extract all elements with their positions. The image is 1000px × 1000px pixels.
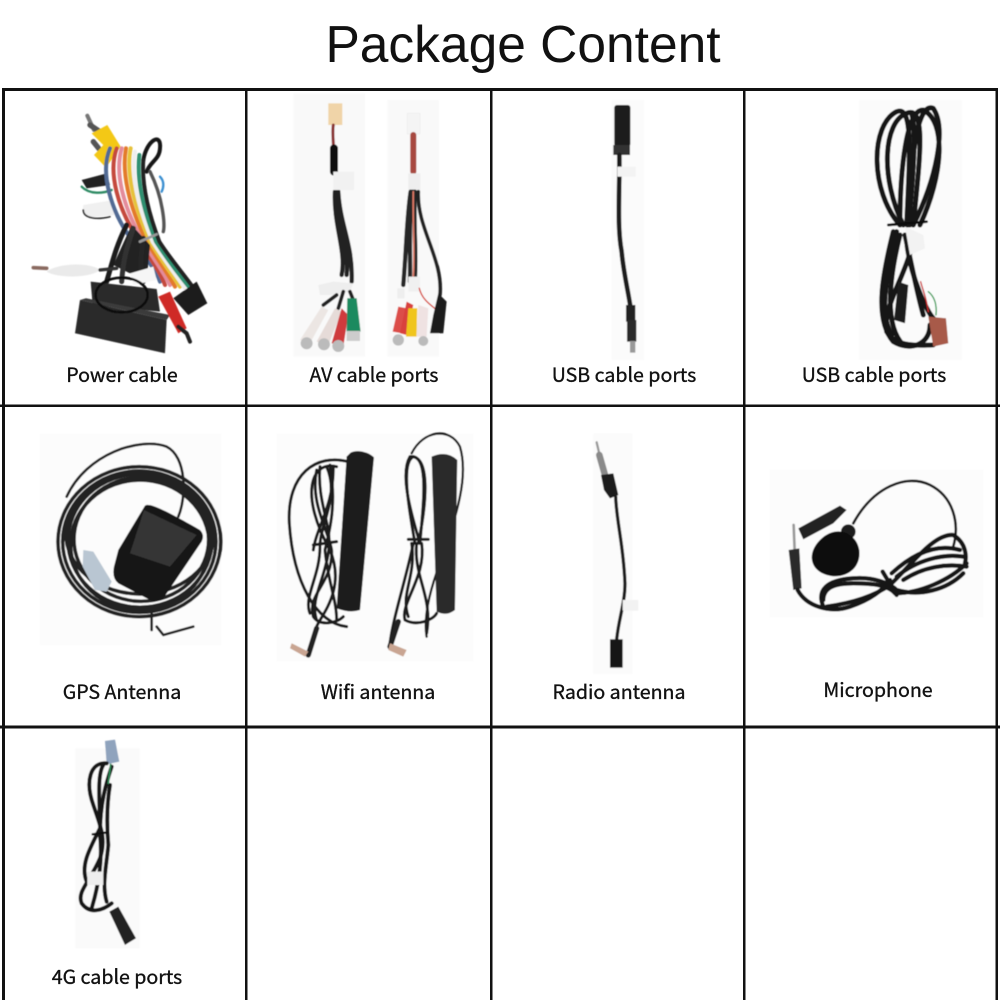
title: Package Content: [325, 15, 721, 73]
photo: power cable harness: [33, 116, 207, 353]
panel: power cable: [33, 116, 207, 388]
photo: radio antenna cable: [593, 433, 638, 674]
photo: Wifi antennas: [277, 433, 473, 662]
label: Wifi antenna: Wifi antenna: [321, 676, 435, 705]
photo: 4G cable: [75, 740, 140, 948]
photo: long USB cable: [859, 100, 962, 360]
panel: Wifi antenna: [277, 433, 473, 705]
panel: AV cable ports: [293, 93, 447, 388]
panel: radio antenna: [552, 433, 686, 705]
label: 4G cable ports: 4G cable ports: [52, 961, 182, 990]
panel: GPS antenna: [40, 433, 222, 705]
photo: lapel microphone: [769, 469, 983, 618]
label: GPS antenna: GPS Antenna: [63, 676, 181, 705]
label: AV cable ports: AV cable ports: [310, 359, 438, 388]
photo: AV cables: [293, 93, 447, 357]
label: power cable: Power cable: [66, 359, 178, 388]
photo: GPS antenna: [40, 433, 222, 645]
label: USB cable ports short: USB cable ports: [552, 359, 696, 388]
panel: USB cable ports short: [552, 100, 696, 388]
photo: short USB cable: [612, 100, 644, 360]
label: radio antenna: Radio antenna: [552, 676, 686, 705]
label: microphone: Microphone: [823, 674, 933, 703]
panel: USB cable ports long: [802, 100, 962, 388]
panel: microphone: [769, 469, 983, 703]
panel: 4G cable ports: [52, 740, 182, 990]
label: USB cable ports long: USB cable ports: [802, 359, 946, 388]
